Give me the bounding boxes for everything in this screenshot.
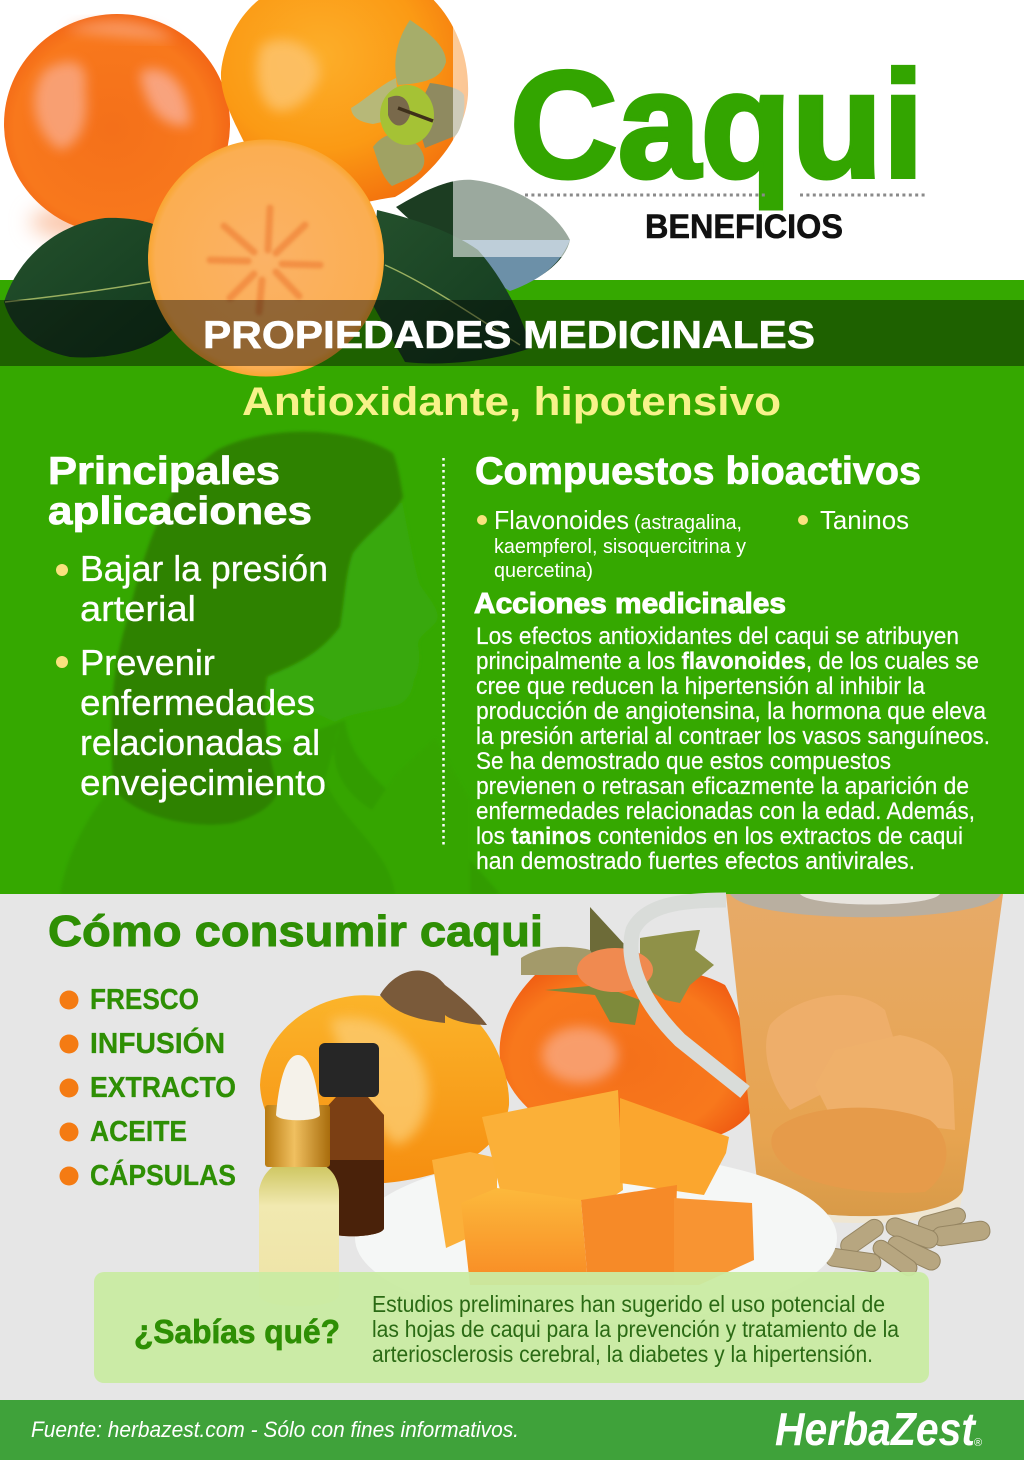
paragraph: principalmente a los flavonoides, de los cuales se: [476, 648, 979, 675]
header background: [0, 0, 1024, 280]
photo: plate with persimmon pieces: [355, 1090, 837, 1323]
bullet two: [56, 642, 326, 803]
footer: ®: [974, 1437, 982, 1449]
subtitle: BENEFICIOS: [645, 208, 843, 246]
paragraph: han demostrado fuertes efectos antivirales.: [476, 848, 915, 875]
photo: amber bottle: [319, 1043, 384, 1236]
callout text: las hojas de caqui para la prevención y tratamiento de la: [372, 1316, 899, 1342]
flavonoides item: Flavonoides: [494, 505, 629, 535]
taninos item: Taninos: [820, 505, 909, 535]
heading: como consumir: Cómo consumir caqui: [48, 907, 543, 956]
orange fruit left: [4, 14, 230, 234]
woman neck and hand: [325, 725, 470, 894]
woman face: [265, 470, 438, 722]
orange fruit right: [221, 0, 468, 215]
persimmon calyx: [521, 907, 714, 1025]
panel: principales aplicaciones: [48, 450, 328, 803]
item extracto: EXTRACTO: [90, 1072, 236, 1104]
flavonoides item: (astragalina,: [634, 512, 742, 534]
callout: sabias que: [94, 1272, 929, 1383]
panel: acciones medicinales: [474, 588, 990, 875]
item capsulas: CÁPSULAS: [90, 1158, 236, 1192]
dotted rule: [525, 194, 925, 196]
soft shadow: [30, 200, 230, 244]
cut persimmon calyx: [380, 971, 487, 1025]
leaf behind right: [396, 180, 570, 290]
heading: Acciones medicinales: [474, 588, 786, 620]
item infusion: INFUSIÓN: [90, 1026, 225, 1060]
callout text: arteriosclerosis cerebral, la diabetes y la hipertensión.: [372, 1341, 873, 1367]
heading: Principales: [48, 450, 280, 493]
bullet two: envejecimiento: [80, 762, 326, 803]
photo: persimmon fruits and leaves: [4, 0, 570, 376]
list: forms of consumption: [60, 984, 236, 1192]
glass handle: [631, 900, 745, 1092]
paragraph: cree que reducen la hipertensión al inhibir la: [476, 673, 926, 700]
washed overlay on photo: [453, 0, 578, 257]
flavonoides item: quercetina): [494, 560, 593, 582]
leaf left: [4, 218, 172, 358]
paragraph: los taninos contenidos en los extractos de caqui: [476, 823, 963, 850]
paragraph: Se ha demostrado que estos compuestos: [476, 748, 891, 775]
dark band: [0, 300, 1024, 366]
flavonoides item: kaempferol, sisoquercitrina y: [494, 536, 746, 558]
bullet two: enfermedades: [80, 682, 315, 723]
photo: tea glass: [631, 894, 1003, 1223]
gray section: [0, 894, 1024, 1400]
subheading: antioxidante: Antioxidante, hipotensivo: [242, 380, 781, 424]
bullet two: relacionadas al: [80, 722, 320, 763]
cut fruit half: [148, 140, 384, 376]
callout text: Estudios preliminares han sugerido el uso potencial de: [372, 1291, 885, 1317]
photo: whole persimmon: [500, 907, 753, 1148]
item aceite: ACEITE: [90, 1116, 187, 1148]
heading: Compuestos bioactivos: [475, 450, 921, 493]
callout heading: ¿Sabías qué?: [134, 1313, 340, 1350]
bullet one: arterial: [80, 588, 196, 629]
woman hair: [111, 432, 403, 825]
title: Caqui: [510, 40, 924, 210]
woman body: [60, 720, 500, 894]
calyx: [351, 20, 464, 186]
green medicinal panel: [0, 280, 1024, 894]
paragraph: la presión arterial al contraer los vasos sanguíneos.: [476, 723, 990, 750]
heading: [48, 450, 312, 533]
bullet two: Prevenir: [80, 642, 215, 683]
photo: woman in green duotone: [60, 432, 500, 894]
panel: compuestos bioactivos: [475, 450, 921, 582]
paragraph: previenen o retrasan eficazmente la aparición de: [476, 773, 969, 800]
dried slices: [766, 995, 897, 1110]
item fresco: FRESCO: [90, 984, 199, 1016]
photo: dropper bottle: [259, 1055, 339, 1306]
flavonoides item: [477, 505, 746, 582]
heading: aplicaciones: [48, 490, 312, 533]
paragraph: Los efectos antioxidantes del caqui se atribuyen: [476, 623, 959, 650]
divider: [442, 458, 445, 848]
photo: capsules: [824, 1206, 991, 1279]
callout text: [372, 1291, 899, 1367]
logo: HerbaZest: [775, 1403, 976, 1455]
paragraph: [476, 623, 990, 875]
source note: Fuente: herbazest.com - Sólo con fines informativos.: [31, 1417, 519, 1442]
photo: cut persimmon: [260, 971, 509, 1183]
bullet one: [56, 548, 328, 629]
heading: propiedades medicinales: PROPIEDADES MEDICINALES: [203, 314, 815, 357]
bullet one: Bajar la presión: [80, 548, 328, 589]
leaf right: [370, 210, 531, 363]
footer: [0, 1400, 1024, 1460]
paragraph: producción de angiotensina, la hormona que eleva: [476, 698, 987, 725]
paragraph: enfermedades relacionadas con la edad. Además,: [476, 798, 975, 825]
